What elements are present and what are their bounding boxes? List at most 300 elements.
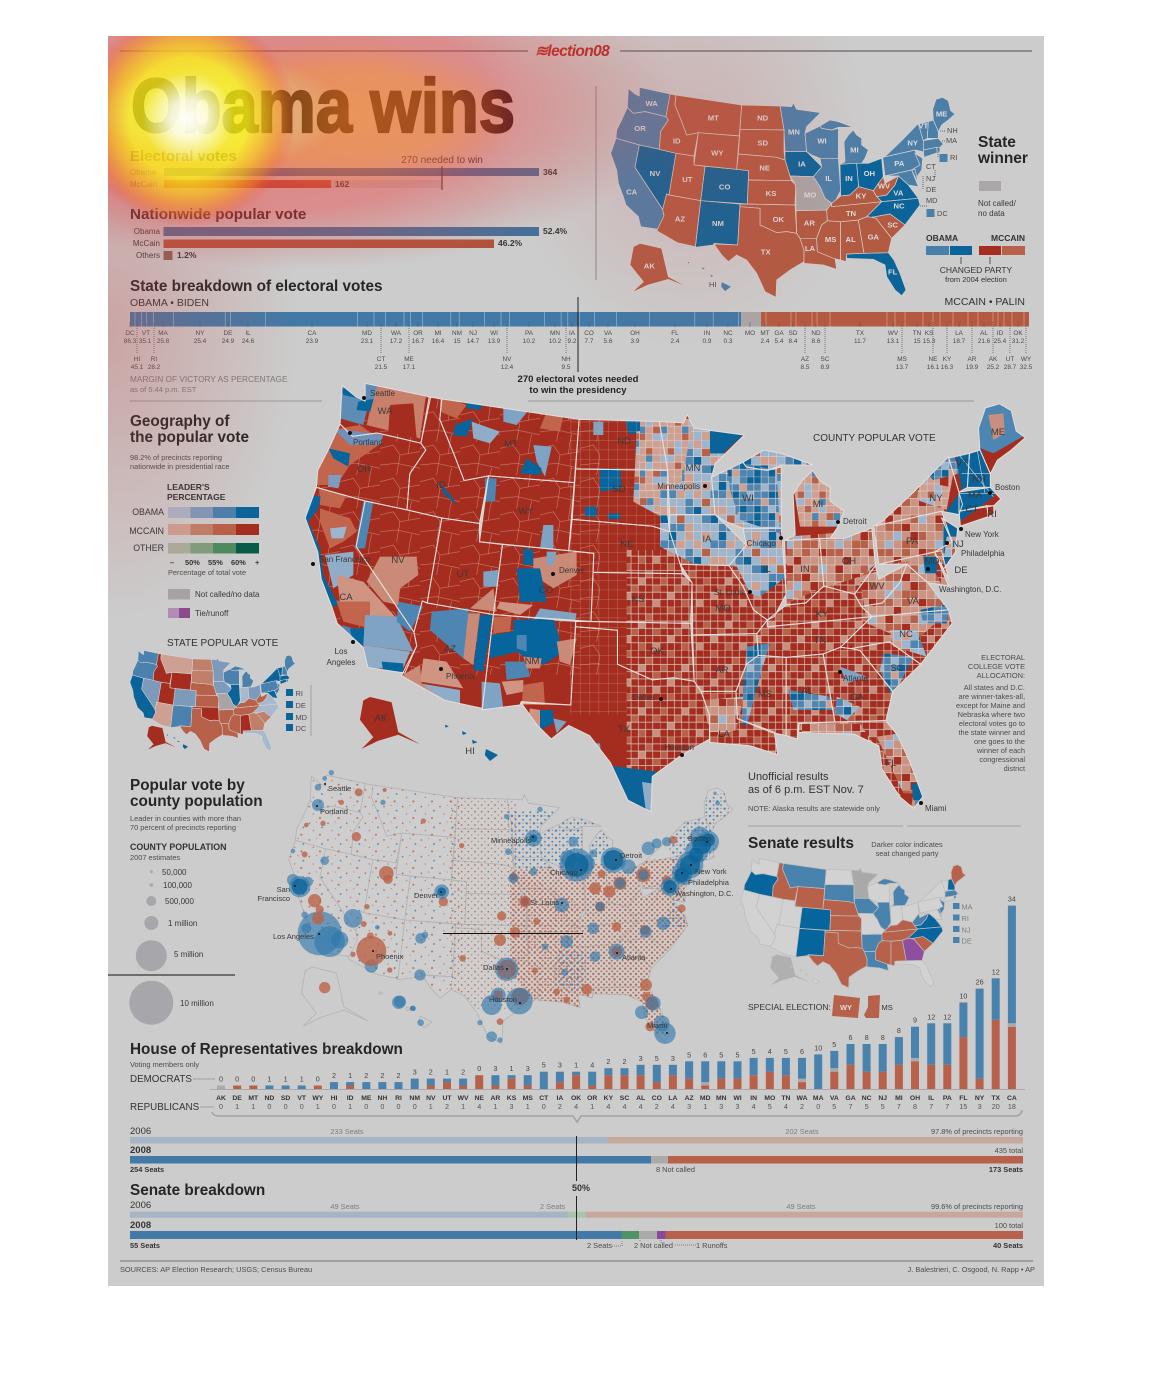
note: margin of victory: as of 5:44 p.m. EST [130, 385, 197, 394]
chart: senate breakdown: Senate breakdown [130, 1182, 265, 1199]
panel: senate results: SPECIAL ELECTION: [748, 1002, 831, 1012]
map: state winner: GA [868, 232, 880, 241]
chart: house of representatives breakdown: MS [523, 1095, 533, 1102]
chart: house of representatives breakdown: 5 [687, 1050, 691, 1059]
map: county popular vote: St. Louis [714, 588, 745, 597]
map: county popular vote: Boston [995, 483, 1020, 492]
map: state winner: KY [856, 192, 866, 201]
chart: house of representatives breakdown: MA [813, 1095, 824, 1102]
chart: house of representatives breakdown: 12 [943, 1012, 951, 1021]
chart: house seats 2006 and 2008 [130, 1126, 1023, 1181]
stray black rules [108, 934, 583, 975]
chart: house seats 2006 and 2008: 2006 [130, 1126, 151, 1137]
chart: electoral vote strip by state: 23.9 [306, 338, 319, 345]
panel: geography of the popular vote legend: Not called/no data [195, 590, 260, 599]
chart: house of representatives breakdown: 1 [574, 1061, 578, 1070]
panel: popular vote by county population legend: 70 percent of precincts reporting [130, 823, 236, 832]
map: state winner: AL [846, 235, 856, 244]
chart: electoral vote strip by state: 11.7 [854, 338, 866, 345]
chart: electoral vote strip by state: OK [1013, 330, 1023, 337]
chart: electoral vote strip by state: OR [413, 330, 423, 337]
chart: house of representatives breakdown: 6 [848, 1033, 852, 1042]
chart: house of representatives breakdown: 5 [881, 1102, 885, 1111]
chart: house of representatives breakdown: IL [928, 1095, 934, 1102]
divider: top map rule [595, 86, 597, 280]
panel: nationwide popular vote bars: Nationwide popular vote [130, 206, 306, 223]
panel: senate results: MS [882, 1003, 893, 1012]
chart: electoral vote strip by state [124, 297, 1033, 372]
panel: popular vote by county population legend [129, 777, 263, 1025]
map: county popular vote: Atlanta [843, 674, 868, 683]
chart: electoral vote strip by state: 8.9 [821, 364, 830, 371]
panel: geography of the popular vote legend: Percentage of total vote [168, 568, 246, 577]
chart: senate breakdown: 100 total [995, 1221, 1023, 1230]
map: state winner: KS [766, 189, 776, 198]
text block: unofficial results: Unofficial results [748, 771, 829, 783]
map: state winner [611, 87, 955, 297]
map: county popular vote: Detroit [843, 517, 867, 526]
map: county popular vote: San Francisco [319, 555, 371, 564]
chart: electoral vote strip by state: NC [723, 330, 733, 337]
map: county popular vote: ME [991, 427, 1005, 438]
text block: electoral college vote allocation: one goes to the [974, 737, 1025, 746]
chart: house of representatives breakdown: 12 [927, 1012, 935, 1021]
text block: electoral college vote allocation: congressional [979, 755, 1025, 764]
map: county popular vote: AR [715, 665, 729, 676]
text block: electoral college vote allocation: COLLEGE VOTE [968, 662, 1025, 671]
chart: electoral vote strip by state: GA [774, 330, 784, 337]
map: state winner: AK [644, 261, 655, 270]
chart: electoral vote strip by state: 10.2 [549, 338, 562, 345]
panel: nationwide popular vote bars: Obama [134, 227, 161, 236]
chart: electoral vote strip by state: MO [745, 330, 755, 337]
map: county popular vote: IL [763, 564, 771, 575]
chart: house of representatives breakdown: 2 [461, 1068, 465, 1077]
map: state winner: PA [894, 159, 905, 168]
map: popular vote by county population bubbles: New York [695, 867, 727, 876]
map: county popular vote: NV [391, 555, 405, 566]
map: popular vote by county population bubbles: Philadelphia [688, 878, 730, 887]
map: state winner: NE [759, 164, 770, 173]
map: county popular vote: WA [378, 406, 393, 417]
chart: electoral vote strip by state: 24.6 [242, 338, 255, 345]
chart: senate breakdown: 49 Seats [330, 1202, 360, 1211]
chart: electoral vote strip by state: 45.1 [131, 364, 144, 371]
panel: nationwide popular vote bars: McCain [133, 239, 160, 248]
map: popular vote by county population bubbles: Portland [320, 807, 348, 816]
chart: house of representatives breakdown: AK [216, 1095, 226, 1102]
chart: senate breakdown: 50% [572, 1183, 590, 1193]
chart: house of representatives breakdown: CO [652, 1095, 662, 1102]
note: margin of victory: MARGIN OF VICTORY AS PERCENTAGE [130, 374, 288, 384]
panel: electoral votes bars: McCain [130, 180, 157, 189]
map: county popular vote: MA [968, 490, 983, 501]
chart: house of representatives breakdown: NY [975, 1095, 985, 1102]
chart: senate breakdown: 2 Seats [540, 1202, 565, 1211]
chart: house of representatives breakdown: DEMOCRATS [130, 1074, 192, 1085]
text block: electoral college vote allocation: Nebraska where two [958, 710, 1025, 719]
chart: house of representatives breakdown: 0 [364, 1102, 368, 1111]
chart: house of representatives breakdown: House of Representatives breakdown [130, 1041, 403, 1058]
chart: house of representatives breakdown: NE [474, 1095, 484, 1102]
legend: state winner: OBAMA [926, 233, 958, 243]
map: county popular vote: TN [814, 635, 826, 646]
chart: electoral vote strip by state: SD [789, 330, 798, 337]
panel: popular vote by county population legend: 10 million [180, 999, 214, 1008]
text block: electoral college vote allocation: ELECTORAL [981, 653, 1025, 662]
chart: house of representatives breakdown: 3 [671, 1054, 675, 1063]
panel: senate results: Senate results [748, 835, 854, 852]
callout: 270 electoral votes needed: 270 electoral votes needed [518, 374, 639, 385]
map: state winner: ME [936, 110, 947, 119]
heading: state breakdown of electoral votes: State breakdown of electoral votes [130, 278, 382, 295]
chart: house seats 2006 and 2008: 202 Seats [785, 1127, 819, 1136]
map labels: small northeast states: MA [946, 136, 957, 145]
chart: electoral vote strip by state: 13.1 [887, 338, 900, 345]
chart: house of representatives breakdown: 1 [284, 1074, 288, 1084]
chart: house of representatives breakdown: FL [959, 1095, 968, 1102]
header: Election08 masthead: ≋lection08 [535, 43, 610, 60]
map: county popular vote: MD [925, 556, 940, 567]
map: popular vote by county population bubbles [257, 763, 734, 1044]
map: state winner: WA [645, 99, 658, 108]
chart: house of representatives breakdown: DE [232, 1095, 242, 1102]
panel: nationwide popular vote bars: Others [136, 251, 160, 260]
chart: house of representatives breakdown: Voting members only [130, 1060, 199, 1069]
panel: geography of the popular vote legend: 55% [208, 558, 223, 567]
chart: house of representatives breakdown: 0 [235, 1074, 239, 1084]
chart: house of representatives breakdown: KS [507, 1095, 517, 1102]
map: county popular vote: NY [929, 493, 943, 504]
map: state winner: FL [888, 267, 898, 276]
chart: electoral vote strip by state: 15.3 [923, 338, 936, 345]
map: county popular vote: MI [813, 499, 823, 510]
chart: house of representatives breakdown: 5 [784, 1047, 788, 1056]
callout: 270 electoral votes needed [518, 374, 639, 396]
map: state winner: CO [719, 182, 730, 191]
map: county popular vote: CA [339, 592, 353, 603]
chart: electoral vote strip by state: 0.9 [703, 338, 712, 345]
heading: county popular vote: COUNTY POPULAR VOTE [813, 433, 936, 444]
chart: house of representatives breakdown: 5 [832, 1040, 836, 1049]
chart: house of representatives breakdown: MD [700, 1095, 711, 1102]
footer: sources and credits: J. Balestrieri, C. Osgood, N. Rapp • AP [908, 1265, 1035, 1274]
map: county popular vote: Portland [353, 438, 383, 447]
chart: electoral vote strip by state: 15 [913, 338, 921, 345]
chart: electoral vote strip by state: LA [955, 330, 964, 337]
chart: house of representatives breakdown: 2 [622, 1057, 626, 1066]
map: county popular vote: RI [987, 509, 997, 520]
chart: electoral vote strip by state: 13.9 [488, 338, 501, 345]
chart: electoral vote strip by state: ID [997, 330, 1004, 337]
chart: electoral vote strip by state: IL [245, 330, 251, 337]
map: county popular vote: Dallas [633, 693, 655, 702]
map: county popular vote: WY [518, 506, 534, 517]
chart: house of representatives breakdown: SD [281, 1095, 290, 1102]
chart: house of representatives breakdown: 3 [639, 1054, 643, 1063]
panel: electoral votes bars: 364 [543, 167, 557, 177]
panel: senate results: DE [962, 936, 972, 946]
heading: state breakdown of electoral votes: MCCAIN • PALIN [944, 296, 1025, 308]
panel: senate results: Darker color indicates [871, 840, 943, 849]
chart: electoral vote strip by state: IN [704, 330, 711, 337]
panel: geography of the popular vote legend: – [170, 558, 174, 567]
chart: house seats 2006 and 2008: 97.8% of precincts reporting [931, 1127, 1023, 1136]
map: county popular vote: Chicago [747, 539, 777, 548]
chart: house of representatives breakdown: LA [668, 1095, 678, 1102]
map: state winner: VA [893, 188, 904, 197]
map: state winner: OH [864, 169, 876, 178]
chart: house of representatives breakdown: 6 [800, 1047, 804, 1056]
chart: house of representatives breakdown: WI [733, 1095, 742, 1102]
chart: house of representatives breakdown: 2 [800, 1102, 804, 1111]
chart: electoral vote strip by state: UT [1006, 356, 1014, 363]
chart: electoral vote strip by state: CO [584, 330, 594, 337]
chart: electoral vote strip by state: 21.5 [375, 364, 388, 371]
chart: electoral vote strip by state: 35.1 [139, 338, 152, 345]
chart: house of representatives breakdown: 1 [510, 1064, 514, 1073]
text block: electoral college vote allocation: are winner-takes-all, [958, 692, 1025, 701]
map: county popular vote: AL [801, 686, 813, 697]
chart: house of representatives breakdown: TX [991, 1095, 1001, 1102]
chart: electoral vote strip by state: KS [925, 330, 933, 337]
map: county popular vote: IN [800, 564, 810, 575]
map: state popular vote [130, 650, 311, 752]
map labels: small northeast states: NH [947, 126, 958, 135]
chart: house of representatives breakdown: 3 [510, 1102, 514, 1111]
chart: electoral vote strip by state: HI [134, 356, 140, 363]
chart: house of representatives breakdown: 0 [251, 1074, 255, 1084]
chart: house of representatives breakdown: OK [571, 1095, 581, 1102]
chart: electoral vote strip by state: 0.3 [724, 338, 733, 345]
chart: senate breakdown: 49 Seats [786, 1202, 816, 1211]
chart: electoral vote strip by state: 5.4 [775, 338, 784, 345]
chart: electoral vote strip by state: PA [525, 330, 534, 337]
map: county popular vote: Houston [664, 743, 694, 752]
chart: electoral vote strip by state: 13.7 [896, 364, 909, 371]
chart: house of representatives breakdown: 1 [267, 1074, 271, 1084]
legend: state winner [926, 134, 1028, 284]
chart: electoral vote strip by state: ME [404, 356, 414, 363]
chart: house seats 2006 and 2008: 2008 [130, 1145, 151, 1156]
legend: state winner: no data [978, 209, 1005, 218]
panel: nationwide popular vote bars: 1.2% [177, 250, 197, 260]
chart: electoral vote strip by state: CA [308, 330, 317, 337]
map: popular vote by county population bubbles: Washington, D.C. [675, 889, 734, 898]
map: state winner: SD [757, 138, 768, 147]
chart: house of representatives breakdown: 2 [396, 1071, 400, 1080]
panel: popular vote by county population legend: 50,000 [162, 868, 187, 877]
map: state winner: AR [804, 218, 815, 227]
chart: electoral vote strip by state: 86.3 [124, 338, 137, 345]
map: county popular vote: KY [816, 609, 829, 620]
chart: electoral vote strip by state: AZ [801, 356, 809, 363]
chart: house of representatives breakdown: 3 [719, 1102, 723, 1111]
map: state winner: NV [650, 169, 661, 178]
map: county popular vote: PA [906, 536, 919, 547]
map: state popular vote: MD [296, 713, 307, 722]
chart: electoral vote strip by state: AL [980, 330, 988, 337]
panel: nationwide popular vote bars: 52.4% [543, 226, 568, 236]
map: county popular vote: VA [907, 596, 920, 607]
panel: geography of the popular vote legend: STATE POPULAR VOTE [167, 638, 279, 649]
chart: electoral vote strip by state: DC [125, 330, 135, 337]
chart: house of representatives breakdown: 26 [976, 978, 984, 987]
chart: house seats 2006 and 2008: 8 Not called [656, 1165, 695, 1174]
map: popular vote by county population bubbles: Houston [489, 995, 517, 1004]
panel: senate results [741, 835, 973, 1018]
chart: house of representatives breakdown: TN [781, 1095, 791, 1102]
chart: electoral vote strip by state: SC [821, 356, 830, 363]
chart: electoral vote strip by state: NJ [469, 330, 477, 337]
map: county popular vote: Denver [559, 566, 585, 575]
chart: house of representatives breakdown: 18 [1008, 1102, 1016, 1111]
map labels: small northeast states: DE [926, 185, 936, 194]
chart: electoral vote strip by state: 32.5 [1020, 364, 1033, 371]
map: state winner: NC [893, 202, 905, 211]
chart: house of representatives breakdown: SC [620, 1095, 629, 1102]
map: state winner: WV [878, 182, 891, 191]
chart: house of representatives breakdown: 4 [784, 1102, 788, 1111]
chart: house of representatives breakdown: 0 [219, 1074, 223, 1084]
chart: house of representatives breakdown: 0 [316, 1074, 320, 1084]
chart: house of representatives breakdown: ME [361, 1095, 372, 1102]
map: state winner: IA [798, 160, 806, 169]
panel: nationwide popular vote bars: 46.2% [498, 238, 523, 248]
map: county popular vote: MO [715, 603, 731, 614]
chart: house of representatives breakdown: PA [943, 1095, 952, 1102]
panel: geography of the popular vote legend: MCCAIN [129, 526, 164, 536]
chart: house of representatives breakdown: 0 [267, 1102, 271, 1111]
chart: senate breakdown: 1 Runoffs [696, 1241, 728, 1250]
chart: house of representatives breakdown: MI [895, 1095, 903, 1102]
chart: house of representatives breakdown: 8 [913, 1102, 917, 1111]
panel: popular vote by county population legend: COUNTY POPULATION [130, 842, 226, 852]
chart: house of representatives breakdown: 0 [413, 1102, 417, 1111]
map: county popular vote: NE [620, 539, 634, 550]
panel: geography of the popular vote legend: LEADER'S [167, 482, 210, 492]
chart: house of representatives breakdown: AL [636, 1095, 645, 1102]
panel: geography of the popular vote legend: PERCENTAGE [167, 492, 226, 502]
chart: house of representatives breakdown: NH [377, 1095, 387, 1102]
chart: house of representatives breakdown: 1 [590, 1102, 594, 1111]
chart: electoral vote strip by state: 28.7 [1004, 364, 1017, 371]
chart: house of representatives breakdown: 8 [881, 1033, 885, 1042]
chart: electoral vote strip by state: 2.4 [671, 338, 680, 345]
chart: house of representatives breakdown: 0 [300, 1102, 304, 1111]
map: popular vote by county population bubbles: Atlanta [622, 953, 646, 962]
chart: house of representatives breakdown: 4 [752, 1102, 756, 1111]
chart: house of representatives breakdown: 5 [655, 1054, 659, 1063]
map: county popular vote: MS [758, 689, 772, 700]
heading: state breakdown of electoral votes [130, 278, 1025, 309]
map: popular vote by county population bubbles: Detroit [620, 851, 643, 860]
chart: electoral vote strip by state: 16.1 [927, 364, 940, 371]
map: county popular vote: WI [742, 493, 754, 504]
map: state winner: IL [825, 174, 832, 183]
chart: senate breakdown: 2008 [130, 1220, 151, 1231]
chart: electoral vote strip by state: 9.2 [568, 338, 577, 345]
chart: electoral vote strip by state: MI [434, 330, 442, 337]
chart: house of representatives breakdown: 2 [429, 1068, 433, 1077]
legend: state winner: from 2004 election [945, 275, 1007, 284]
chart: house of representatives breakdown: 6 [703, 1050, 707, 1059]
chart: electoral vote strip by state: 16.3 [941, 364, 954, 371]
chart: house of representatives breakdown: MO [764, 1095, 775, 1102]
chart: house of representatives breakdown: 4 [574, 1102, 578, 1111]
chart: house of representatives breakdown: 7 [929, 1102, 933, 1111]
map: state winner: AZ [675, 215, 685, 224]
chart: house of representatives breakdown: 0 [380, 1102, 384, 1111]
chart: electoral vote strip by state: 25.2 [987, 364, 1000, 371]
heading: state breakdown of electoral votes: OBAMA • BIDEN [130, 297, 209, 309]
chart: electoral vote strip by state: 17.2 [390, 338, 403, 345]
chart: house of representatives breakdown: 34 [1008, 895, 1016, 904]
chart: house of representatives breakdown: 0 [542, 1102, 546, 1111]
map: state winner: ND [757, 113, 769, 122]
chart: senate breakdown: 2006 [130, 1200, 151, 1211]
chart: house of representatives breakdown: 0 [219, 1102, 223, 1111]
map labels: small northeast states: HI [709, 280, 716, 289]
chart: electoral vote strip by state: 25.4 [994, 338, 1007, 345]
map: county popular vote: SD [612, 484, 626, 495]
chart: house of representatives breakdown: 0 [477, 1064, 481, 1073]
chart: electoral vote strip by state: WV [888, 330, 899, 337]
chart: electoral vote strip by state: NE [929, 356, 937, 363]
panel: geography of the popular vote legend: 50% [185, 558, 200, 567]
chart: house of representatives breakdown: 7 [848, 1102, 852, 1111]
chart: electoral vote strip by state: 8.4 [789, 338, 798, 345]
panel: electoral votes bars: Electoral votes [130, 148, 237, 165]
panel: popular vote by county population legend: 100,000 [163, 881, 192, 890]
chart: house of representatives breakdown: 0 [332, 1102, 336, 1111]
chart: electoral vote strip by state: 10.2 [523, 338, 536, 345]
chart: house of representatives breakdown: 1 [251, 1102, 255, 1111]
chart: house of representatives breakdown: GA [845, 1095, 856, 1102]
chart: house of representatives breakdown: OH [910, 1095, 920, 1102]
chart: electoral vote strip by state: CT [377, 356, 385, 363]
title: Obama wins [131, 64, 515, 149]
chart: electoral vote strip by state: 16.7 [412, 338, 425, 345]
map: county popular vote: New York [965, 530, 1000, 539]
panel: popular vote by county population legend: Leader in counties with more than [130, 814, 241, 823]
map: county popular vote: CT [966, 504, 979, 515]
map: popular vote by county population bubbles: Chicago [550, 868, 578, 877]
chart: house of representatives breakdown: 4 [606, 1102, 610, 1111]
chart: house of representatives breakdown: IN [750, 1095, 757, 1102]
map: county popular vote: HI [465, 746, 475, 757]
chart: electoral vote strip by state: 23.1 [361, 338, 374, 345]
panel: electoral votes bars [130, 148, 557, 190]
chart: house of representatives breakdown: 2 [606, 1057, 610, 1066]
map: county popular vote: AZ [444, 644, 456, 655]
text block: unofficial results: NOTE: Alaska results are statewide only [748, 804, 880, 813]
panel: geography of the popular vote legend: OBAMA [132, 507, 164, 517]
chart: house of representatives breakdown: 7 [897, 1102, 901, 1111]
chart: electoral vote strip by state: 8.5 [801, 364, 810, 371]
chart: house of representatives breakdown: 8 [865, 1033, 869, 1042]
map: county popular vote: LA [718, 729, 730, 740]
chart: house of representatives breakdown: 1 [300, 1074, 304, 1084]
map: county popular vote: DE [954, 565, 968, 576]
panel: popular vote by county population legend: 500,000 [165, 897, 194, 906]
map labels: small northeast states: CT [926, 162, 936, 171]
legend: state winner: MCCAIN [991, 233, 1025, 243]
map: county popular vote: VT [956, 458, 968, 469]
chart: house seats 2006 and 2008: 435 total [995, 1146, 1023, 1155]
map: state winner: WI [817, 137, 827, 146]
chart: house of representatives breakdown: 4 [622, 1102, 626, 1111]
